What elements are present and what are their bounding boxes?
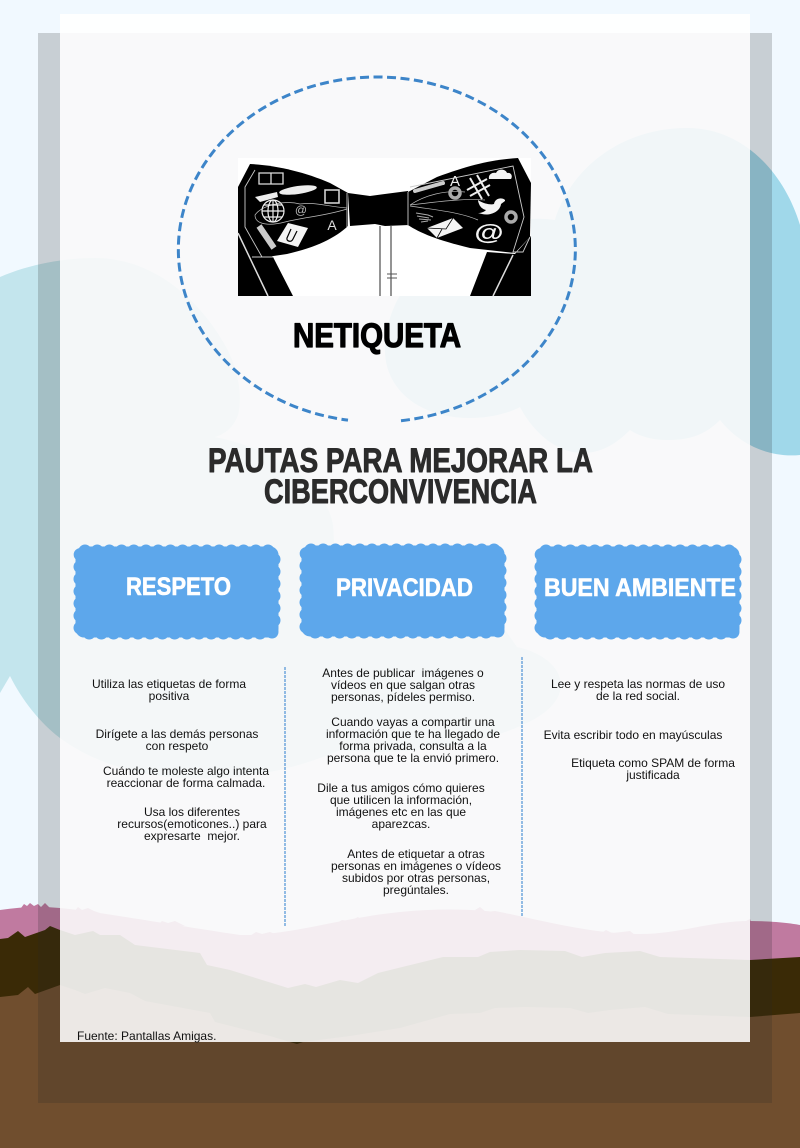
hashtag (467, 175, 490, 199)
tip 3: imágenes etc en las que (336, 805, 466, 819)
source note: Fuente: Pantallas Amigas. (77, 1029, 216, 1043)
dashed circle around logo (178, 77, 575, 421)
tip 3: que utilicen la información, (330, 793, 472, 807)
tip 4: personas en imágenes o vídeos (331, 859, 501, 873)
tip 4: expresarte mejor. (144, 829, 240, 843)
tip 1: positiva (149, 689, 190, 703)
badge: Buen Ambiente: BUEN AMBIENTE (544, 574, 736, 602)
icon: bow tie with internet symbols (238, 158, 531, 296)
badge: Privacidad (306, 550, 500, 632)
left cloud (0, 258, 561, 779)
right pencil (415, 183, 443, 191)
envelope (427, 218, 463, 238)
tablet (325, 190, 339, 203)
tip 3 (103, 764, 269, 790)
tip 4: pregúntales. (383, 883, 449, 897)
tip 2: Evita escribir todo en mayúsculas (544, 728, 722, 742)
note with paperclip (277, 223, 308, 247)
tip 2: información que te ha llegado de (326, 727, 500, 741)
tip 4 (331, 847, 501, 897)
subtitle (208, 442, 593, 511)
tip 3: Etiqueta como SPAM de forma (571, 756, 735, 770)
tip 3 (571, 756, 735, 782)
wing outlines (245, 166, 530, 257)
gears (450, 188, 460, 198)
tip 4: subidos por otras personas, (342, 871, 490, 885)
tip 2 (326, 715, 500, 765)
tip 3 (317, 781, 485, 831)
badge: Respeto (80, 551, 274, 633)
tip 3: Dile a tus amigos cómo quieres (317, 781, 485, 795)
tip 4: Antes de etiquetar a otras (347, 847, 485, 861)
right cloud (385, 128, 800, 455)
tip 1 (92, 677, 246, 703)
pencil (259, 226, 274, 248)
text column: Privacidad (317, 666, 501, 897)
small at sign: @ (295, 203, 307, 217)
left wing (238, 164, 348, 258)
dark soil (0, 926, 800, 1046)
tip 2: persona que te la envió primero. (327, 751, 499, 765)
tip 3: Cuándo te moleste algo intenta (103, 764, 269, 778)
pen (279, 183, 317, 197)
knot (348, 191, 409, 226)
at sign: @ (474, 220, 504, 245)
tip 1: vídeos en que salgan otras (331, 678, 475, 692)
tip 2: Cuando vayas a compartir una (331, 715, 495, 729)
hill grass tufts (21, 903, 752, 936)
subtitle line 1: PAUTAS PARA MEJORAR LA (208, 442, 593, 480)
tip 1: Utiliza las etiquetas de forma (92, 677, 246, 691)
tip 2: forma privada, consulta a la (339, 739, 487, 753)
tip 1: de la red social. (596, 689, 680, 703)
badge: Privacidad: PRIVACIDAD (336, 574, 473, 602)
paper stack (416, 213, 433, 222)
text column: Respeto (92, 677, 269, 843)
tip 2: Dirígete a las demás personas (96, 727, 258, 741)
tip 2 (96, 727, 258, 753)
tip 4 (117, 805, 267, 843)
badge: Respeto: RESPETO (126, 573, 231, 601)
pink hill (0, 907, 800, 1000)
white translucent content panel (60, 14, 750, 1042)
book (259, 173, 283, 184)
suspenders (238, 226, 531, 296)
badge: Buen Ambiente (541, 551, 736, 633)
tip 4: Usa los diferentes (144, 805, 240, 819)
twitter bird (478, 198, 505, 215)
text column: Buen Ambiente (544, 677, 735, 782)
tip 3: reaccionar de forma calmada. (107, 776, 265, 790)
globe (262, 200, 284, 222)
cloud (489, 170, 512, 179)
tip 1: Lee y respeta las normas de uso (551, 677, 725, 691)
tip 3: justificada (625, 768, 680, 782)
letter A: A (327, 217, 337, 233)
right letter A: A (450, 173, 460, 190)
right wing (408, 158, 531, 253)
title: NETIQUETA (293, 317, 461, 355)
shirt placket (380, 226, 391, 296)
tip 1: personas, pídeles permiso. (331, 690, 475, 704)
tip 2: con respeto (146, 739, 209, 753)
tip 1: Antes de publicar imágenes o (322, 666, 484, 680)
tip 4: recursos(emoticones..) para (117, 817, 267, 831)
tip 3: aparezcas. (372, 817, 430, 831)
tip 1 (322, 666, 484, 704)
brown ground (0, 985, 800, 1148)
subtitle line 2: CIBERCONVIVENCIA (264, 473, 537, 511)
tip 1 (551, 677, 725, 703)
